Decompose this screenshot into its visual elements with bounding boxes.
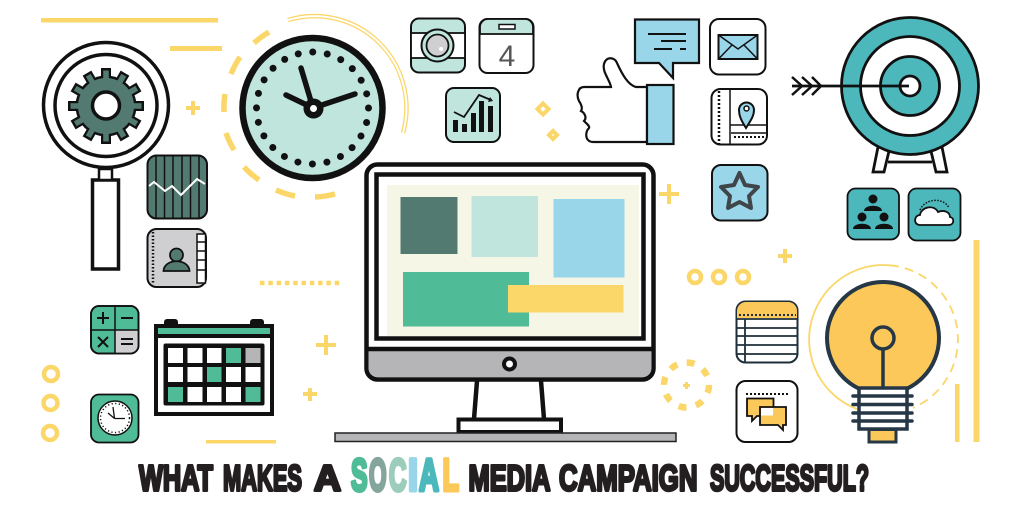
- icon: star tile: [712, 165, 768, 220]
- icon: calendar grid: [156, 319, 272, 414]
- icon: notes table tile: [736, 302, 798, 362]
- icon: magnifying glass with gear: [44, 42, 168, 269]
- monitor screen: [376, 174, 644, 338]
- icon: thumbs up: [578, 58, 674, 144]
- decorative yellow accents: [41, 18, 980, 444]
- icon: wall clock with dashed ring: [224, 16, 406, 197]
- title: A: [314, 458, 341, 498]
- title: SUCCESSFUL?: [710, 458, 869, 498]
- title: MEDIA: [468, 458, 550, 498]
- title: O: [369, 449, 386, 500]
- icon: map pin tile: [712, 89, 767, 144]
- title: CAMPAIGN: [559, 458, 698, 498]
- monitor base: [458, 420, 561, 432]
- title: L: [442, 449, 459, 500]
- monitor body: [366, 164, 654, 380]
- title: A: [419, 449, 439, 500]
- icon: envelope tile: [710, 19, 766, 74]
- monitor chin: [368, 350, 652, 377]
- icon: address book tile: [148, 229, 206, 287]
- title: MAKES: [223, 458, 302, 498]
- desk surface: [335, 433, 676, 442]
- icon: small clock tile: [91, 394, 138, 442]
- icon: calendar page tile: 4: [499, 40, 515, 73]
- title: S: [351, 449, 368, 500]
- bulb halo: [809, 265, 890, 409]
- title: [139, 449, 869, 500]
- icon: calculator tile: [91, 306, 138, 354]
- icon: people tile: [848, 188, 899, 240]
- icon: light bulb: [809, 265, 958, 442]
- title: C: [389, 449, 406, 500]
- icon: cloud tile: [908, 188, 960, 240]
- icon: calendar page tile: [480, 19, 534, 73]
- icon: chat tile: [736, 381, 798, 442]
- screen blocks: [400, 197, 458, 254]
- title: I: [408, 449, 418, 500]
- monitor stand: [474, 381, 544, 419]
- icon: speech bubble: [635, 20, 699, 78]
- icon: line graph tile: [148, 156, 207, 218]
- icon: growth chart tile: [446, 88, 500, 142]
- icon: target with arrow: [792, 18, 978, 172]
- title: WHAT: [139, 458, 213, 498]
- icon: camera tile: [411, 18, 465, 72]
- icon: desktop monitor: [335, 164, 676, 442]
